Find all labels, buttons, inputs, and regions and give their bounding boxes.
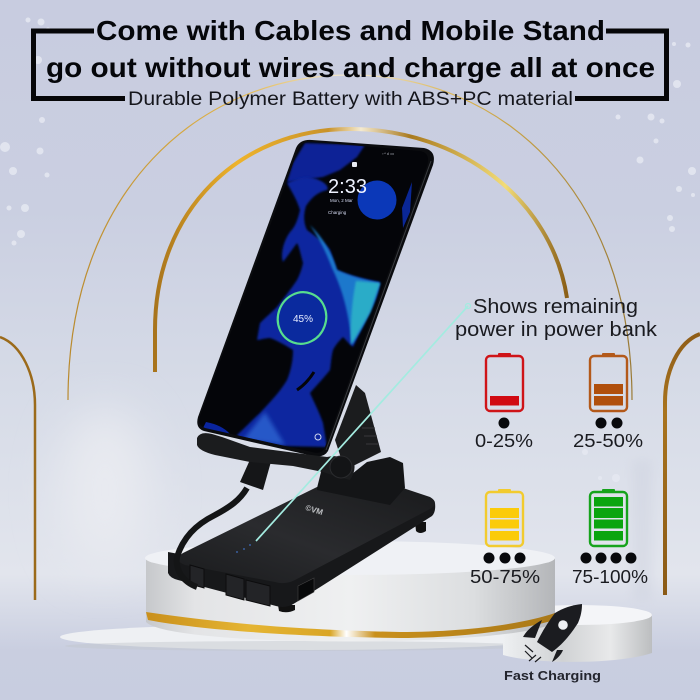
snow particles bbox=[0, 18, 696, 482]
charging ring bbox=[276, 291, 328, 345]
heading line 2: go out without wires and charge all at once bbox=[46, 52, 655, 83]
USB port bbox=[298, 578, 314, 601]
small podium bbox=[503, 605, 652, 662]
indicator heading: Shows remaining bbox=[473, 296, 638, 318]
bank lower body bbox=[168, 503, 435, 607]
stand ribs bbox=[362, 428, 379, 444]
wallpaper sliver bbox=[402, 182, 412, 228]
lock date: Mon, 2 Mar bbox=[330, 198, 353, 203]
phone edge highlight bbox=[326, 161, 431, 450]
battery 75-100%: 75-100% bbox=[572, 567, 648, 587]
power bank and stand bbox=[168, 385, 435, 612]
wallpaper planet bbox=[358, 180, 396, 220]
heading line 1: Come with Cables and Mobile Stand bbox=[96, 15, 605, 46]
icon: rocket bbox=[523, 604, 582, 662]
hinge block bbox=[317, 457, 405, 505]
battery 0-25%: 0-25% bbox=[475, 431, 533, 451]
soft light glow left of stand bbox=[60, 410, 150, 570]
screen wallpaper bbox=[204, 142, 412, 448]
left side arch bbox=[0, 337, 35, 600]
bank top bbox=[178, 487, 435, 583]
lock time: 2:33 bbox=[328, 176, 367, 198]
base disc bbox=[60, 624, 560, 651]
phone body bbox=[197, 140, 434, 456]
feet bbox=[278, 522, 426, 612]
phone clamp bbox=[197, 433, 355, 480]
subheading: Durable Polymer Battery with ABS+PC material bbox=[128, 89, 573, 110]
thin outer gold arch bbox=[68, 75, 632, 400]
lock icon bbox=[352, 162, 357, 167]
cable plug bbox=[240, 453, 272, 490]
right side arch bbox=[665, 334, 700, 595]
logo: ©VM bbox=[304, 503, 324, 517]
battery 50-75% bbox=[470, 489, 540, 587]
battery 50-75%: 50-75% bbox=[470, 567, 540, 587]
stand arm bbox=[335, 385, 381, 470]
charge percent: 45% bbox=[293, 314, 313, 325]
camera icon bbox=[315, 434, 321, 440]
phone bbox=[190, 135, 440, 465]
status icons: ▫ ⁿ ıl ▭ bbox=[382, 151, 394, 156]
soft light column behind right side bbox=[632, 460, 652, 600]
thick inner gold arch bbox=[155, 129, 567, 372]
leader line bbox=[256, 304, 470, 541]
LED dots bbox=[236, 544, 251, 553]
charging label: Charging bbox=[328, 210, 347, 215]
cable compartments bbox=[190, 565, 270, 606]
battery 25-50%: 25-50% bbox=[573, 431, 643, 451]
fast charging label: Fast Charging bbox=[504, 668, 601, 683]
large podium bbox=[145, 541, 555, 642]
indicator heading: power in power bank bbox=[455, 319, 658, 341]
cable bbox=[177, 488, 247, 587]
battery 0-25% bbox=[475, 353, 533, 451]
hinge knob bbox=[330, 456, 352, 478]
battery 25-50% bbox=[573, 353, 643, 451]
title frame bbox=[34, 31, 666, 98]
battery 75-100% bbox=[572, 489, 648, 587]
indicator heading bbox=[455, 296, 658, 341]
